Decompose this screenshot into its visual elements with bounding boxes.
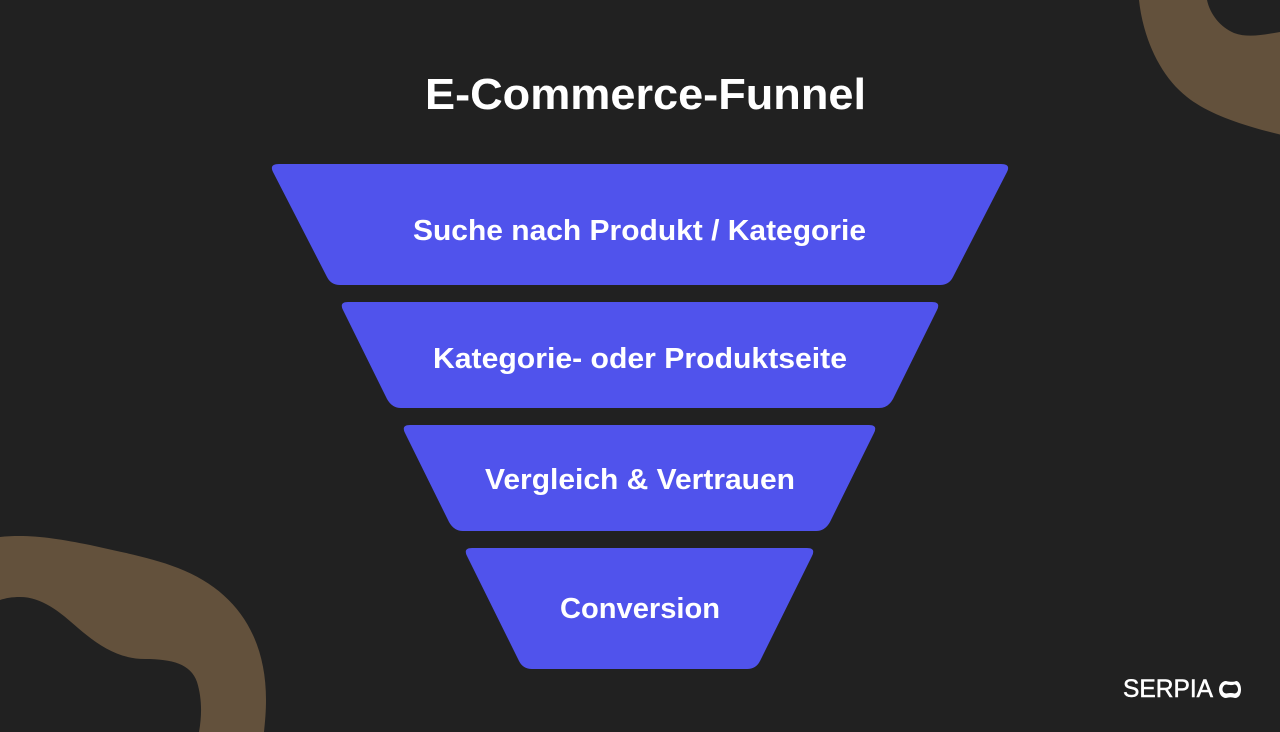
funnel stage 3: comparison and trust: [404, 425, 875, 531]
funnel stage 1: search: Suche nach Produkt / Kategorie: [413, 215, 866, 247]
funnel stage 3: comparison and trust: Vergleich & Vertrauen: [485, 464, 795, 496]
funnel stage 4: conversion: Conversion: [560, 593, 720, 625]
funnel stage 2: category or product page: Kategorie- oder Produktseite: [433, 343, 847, 375]
funnel stage 2: category or product page: [342, 302, 938, 408]
decorative blob: top right: [1139, 0, 1280, 134]
title: E-Commerce-Funnel: [425, 70, 866, 119]
funnel stage 1: search: [272, 164, 1008, 285]
funnel stage 4: conversion: [466, 548, 813, 669]
icon: logo mark: [1219, 681, 1241, 698]
funnel: [272, 164, 1008, 669]
logo: SERPIA: SERPIA: [1123, 675, 1213, 703]
decorative blob: bottom left: [0, 536, 266, 732]
